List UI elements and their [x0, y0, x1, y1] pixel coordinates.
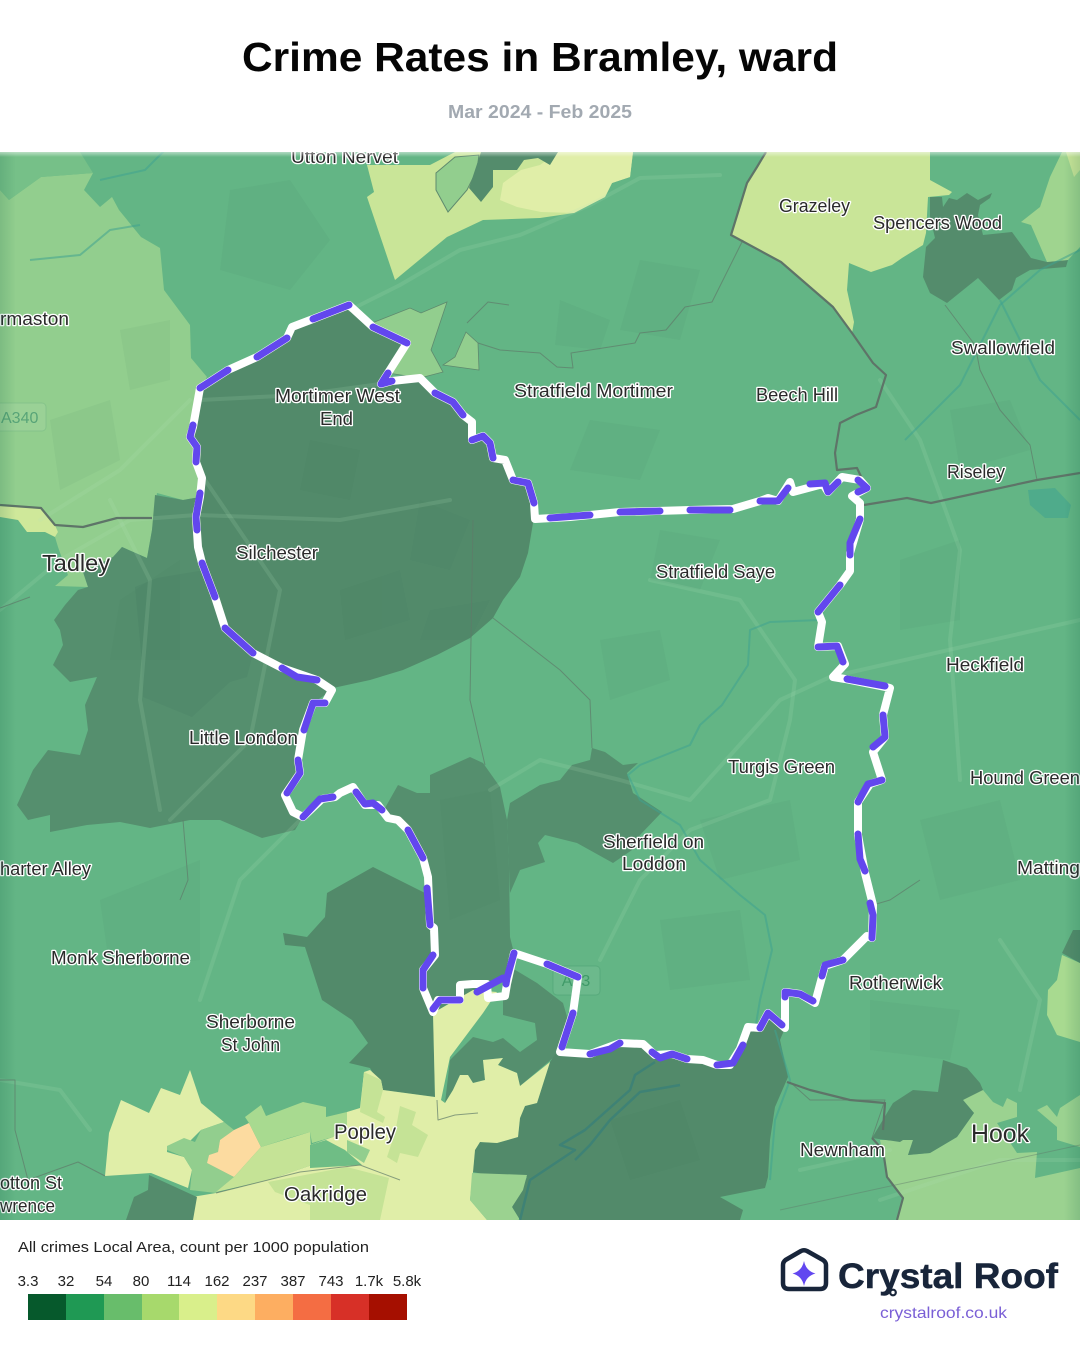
legend scale values: 162: [204, 1273, 230, 1290]
choropleth map: [0, 147, 1080, 1220]
place labels: Sherfield on: [603, 832, 704, 852]
legend: [18, 1239, 422, 1320]
wordmark: Crystal Roof: [838, 1257, 1058, 1296]
zone: Grazeley: [731, 152, 952, 333]
place labels: St John: [221, 1035, 280, 1055]
place labels: Rotherwick: [849, 973, 943, 993]
roads: [0, 175, 1080, 1200]
legend scale values: 114: [167, 1273, 191, 1290]
zone: ring around peach: [167, 1122, 234, 1193]
zone: yellow patch by Tadley: [0, 504, 58, 537]
place labels: Sherborne: [206, 1012, 295, 1032]
road label: A340: A340: [1, 410, 38, 427]
zone: Hook light: [880, 1090, 1080, 1220]
legend scale values: 5.8k: [393, 1273, 422, 1290]
legend scale values: 1.7k: [355, 1273, 384, 1290]
zone: north of peach mid green: [245, 1102, 347, 1147]
place labels: End: [320, 409, 353, 429]
place labels: Monk Sherborne: [51, 948, 190, 968]
place labels: rmaston: [0, 309, 69, 329]
place labels: otton St: [0, 1173, 62, 1193]
legend scale values: 387: [280, 1273, 306, 1290]
place labels: Stratfield Mortimer: [514, 381, 673, 401]
zone: north-west corner: [0, 152, 93, 200]
place labels: Utton Nervet: [291, 147, 398, 167]
place labels: Mortimer West: [275, 386, 400, 406]
place labels: Stratfield Saye: [656, 562, 775, 582]
legend scale values: 237: [242, 1273, 268, 1290]
zone: yellow green band: [216, 1132, 312, 1192]
legend scale values: 54: [96, 1273, 112, 1290]
zone: south-east dark: [473, 1013, 788, 1220]
place labels: Little London: [189, 728, 298, 748]
legend scale values: [18, 1273, 422, 1290]
zone: Spencers Wood dark: [923, 193, 1068, 303]
icon: house with star: [783, 1250, 826, 1289]
legend scale values: 32: [58, 1273, 74, 1290]
place labels: wrence: [0, 1196, 55, 1216]
zone: upper pale yellow: [500, 152, 633, 213]
zone: upper dark patch: [469, 152, 558, 202]
terrain patches: [50, 180, 1030, 1180]
title: Crime Rates in Bramley, ward: [242, 34, 838, 80]
zone: bottom-left dark: [126, 1175, 197, 1220]
boundary purple dashes: [190, 305, 885, 1065]
ward boundary: Bramley: [190, 305, 890, 1065]
place labels: Silchester: [236, 543, 318, 563]
zone: railway central dark: [385, 757, 514, 1013]
road label: A33: A33: [562, 973, 590, 990]
place labels: Newnham: [800, 1140, 885, 1160]
lake near Riseley: [1028, 488, 1071, 518]
place labels: harter Alley: [0, 859, 91, 879]
road label: A33: [553, 966, 600, 995]
place labels: Beech Hill: [756, 385, 838, 405]
place labels: Grazeley: [779, 196, 850, 216]
place labels: Turgis Green: [728, 757, 835, 777]
zone: peach high rate: [207, 1123, 261, 1177]
zone: Popley green patch: [310, 1140, 362, 1168]
legend scale values: 743: [318, 1273, 344, 1290]
zone: Hook east light: [1037, 1095, 1080, 1147]
zone: north-east light: [1021, 152, 1080, 262]
boundary white base: [190, 305, 890, 1065]
website url: crystalroof.co.uk: [880, 1305, 1008, 1322]
zone: Sherborne dark: [283, 867, 435, 1097]
zone: upper yellow green: [367, 152, 633, 280]
zone: south of ward dark: [445, 968, 568, 1103]
place labels: Spencers Wood: [873, 213, 1002, 233]
zone: west yellow: [105, 1070, 224, 1188]
zone: Sherfield dark: [507, 748, 662, 893]
place labels: Hound Green: [970, 768, 1080, 788]
legend scale values: 3.3: [18, 1273, 38, 1290]
rivers: [30, 150, 1080, 1180]
place labels: Heckfield: [946, 655, 1024, 675]
place labels: [0, 147, 1080, 1216]
zone: Popley light patch: [347, 1140, 370, 1163]
zone: Basingstoke yellow: [190, 990, 550, 1220]
zone: east edge dark: [1062, 930, 1080, 963]
legend colour bar: [28, 1294, 407, 1320]
place labels: Swallowfield: [951, 338, 1055, 358]
place labels: Tadley: [42, 550, 111, 576]
zone: Little London inner dark: [135, 570, 253, 717]
county boundary lines: [0, 152, 1080, 1220]
zone: Silchester dark (ward north): [190, 305, 534, 688]
subtitle: date range: Mar 2024 - Feb 2025: [448, 101, 632, 122]
zone: upper mid green patch: [436, 155, 479, 212]
zone: Little London dark: [17, 495, 332, 838]
logo: Crystal Roof: [783, 1250, 1058, 1322]
boundary lines: [0, 240, 1080, 1210]
place labels: Oakridge: [284, 1184, 367, 1206]
legend scale values: 80: [133, 1273, 149, 1290]
legend title: All crimes Local Area, count per 1000 population: [18, 1239, 369, 1256]
place labels: Loddon: [622, 854, 686, 874]
zone: Hook dark: [872, 1060, 983, 1155]
zone: north-east tip: [1066, 152, 1080, 177]
place labels: Riseley: [947, 462, 1005, 482]
place labels: Hook: [971, 1120, 1029, 1148]
place labels: Popley: [334, 1121, 396, 1144]
zone: western light green area: [0, 173, 207, 587]
zone: Stratfield Mortimer light patches: [372, 302, 479, 378]
zone: Popley patches: [268, 1072, 428, 1220]
zone: light green south: [470, 1173, 527, 1220]
zone: Odiham light: [1047, 955, 1080, 1042]
place labels: Matting: [1017, 858, 1080, 878]
road label: A340: [0, 403, 46, 431]
